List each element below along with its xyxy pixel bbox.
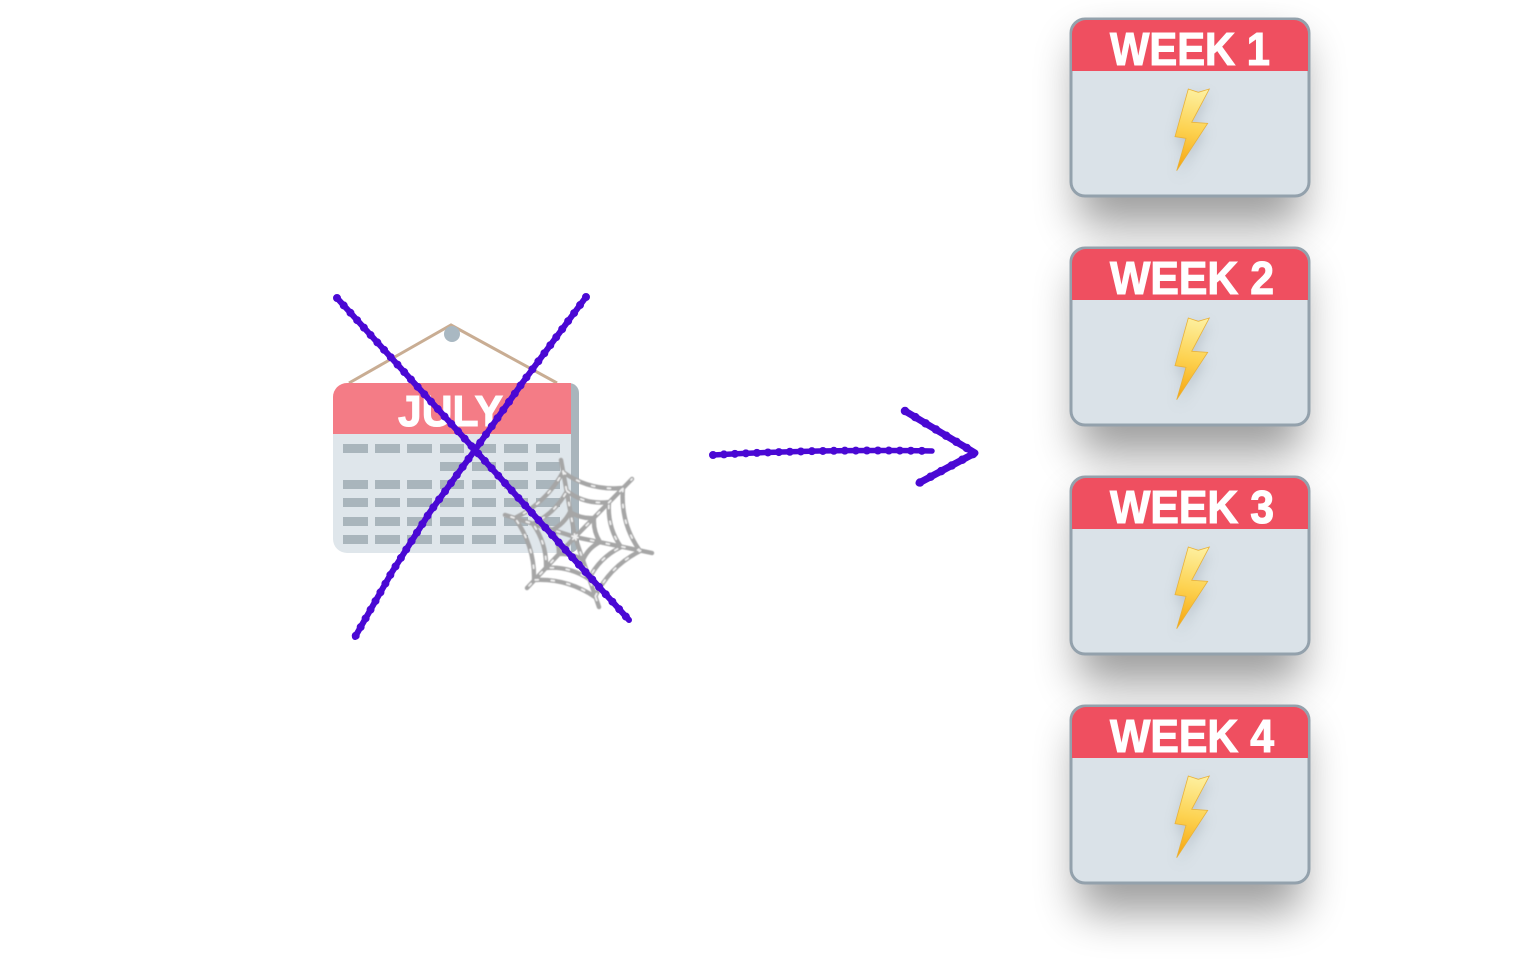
card shadow bbox=[1078, 500, 1302, 684]
card body bbox=[1071, 477, 1309, 654]
card: week 2 bbox=[1071, 248, 1309, 455]
crossed-out mark bbox=[337, 297, 629, 637]
card header bbox=[1072, 707, 1308, 758]
card body bbox=[1071, 248, 1309, 425]
icon: lightning bolt bbox=[1175, 89, 1209, 178]
card shadow bbox=[1078, 271, 1302, 455]
icon: spider web bbox=[505, 460, 652, 607]
week label: WEEK 4 bbox=[1110, 710, 1274, 762]
calendar nail bbox=[444, 326, 460, 342]
card shadow bbox=[1078, 729, 1302, 913]
card header bbox=[1072, 20, 1308, 71]
calendar day grid bbox=[343, 444, 560, 544]
calendar header bbox=[333, 383, 571, 434]
calendar body bbox=[333, 433, 571, 553]
icon: lightning bolt bbox=[1175, 776, 1209, 865]
card shadow bbox=[1078, 42, 1302, 226]
card body bbox=[1071, 706, 1309, 883]
card header bbox=[1072, 478, 1308, 529]
card header bbox=[1072, 249, 1308, 300]
week label: WEEK 2 bbox=[1110, 252, 1274, 304]
card: week 3 bbox=[1071, 477, 1309, 684]
icon: lightning bolt bbox=[1175, 547, 1209, 636]
july calendar bbox=[333, 325, 579, 553]
card: week 1 bbox=[1071, 19, 1309, 226]
week label: WEEK 3 bbox=[1110, 481, 1274, 533]
icon: lightning bolt bbox=[1175, 318, 1209, 407]
card: week 4 bbox=[1071, 706, 1309, 913]
calendar back page bbox=[340, 383, 579, 553]
week label: WEEK 1 bbox=[1110, 23, 1270, 75]
arrow bbox=[713, 411, 975, 483]
month label: JULY bbox=[398, 387, 503, 436]
calendar hanger string bbox=[349, 325, 557, 383]
card body bbox=[1071, 19, 1309, 196]
